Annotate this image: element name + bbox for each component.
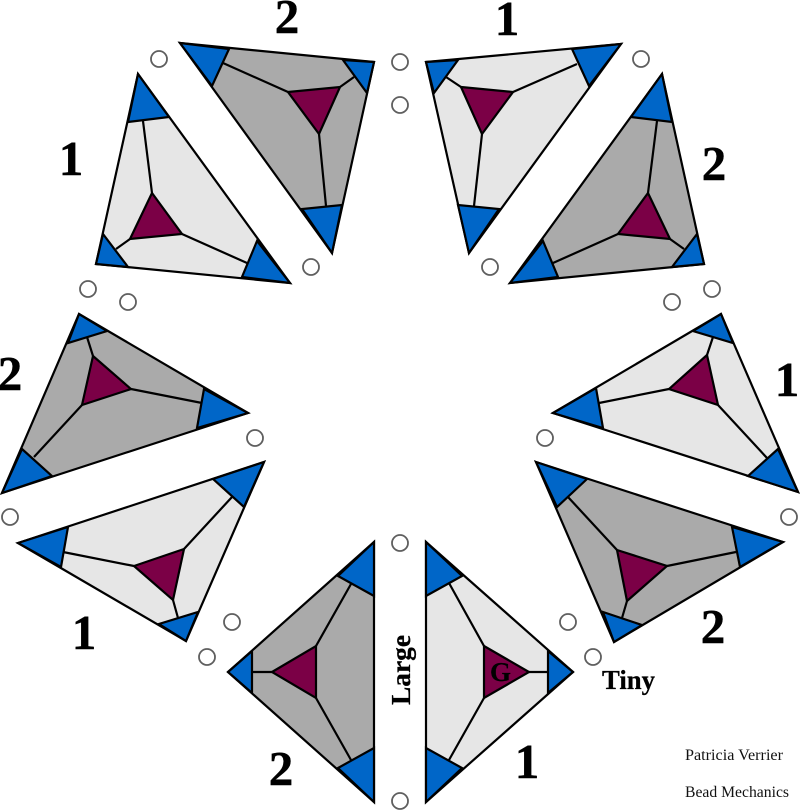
panel: lower left triangle, type 1 — [18, 462, 264, 641]
panel: top left triangle, type 2 — [180, 43, 374, 253]
type numbers: 1 — [59, 131, 83, 186]
credit: author: Patricia Verrier — [685, 747, 784, 764]
type numbers: 1 — [515, 734, 539, 789]
type numbers: 1 — [72, 605, 96, 660]
panel: right triangle, type 1 — [553, 314, 798, 492]
panel: top right triangle, type 1 — [426, 44, 621, 253]
type numbers: 2 — [702, 136, 726, 191]
panel: bottom left triangle, type 2 — [228, 542, 374, 802]
label: G: G — [490, 657, 511, 687]
type numbers: 2 — [269, 741, 293, 796]
panel: left triangle, type 2 — [2, 314, 248, 493]
type numbers: 2 — [701, 599, 725, 654]
credit: organisation: Bead Mechanics — [685, 784, 789, 801]
panel: lower right triangle, type 2 — [536, 462, 783, 642]
label: Tiny: Tiny — [602, 665, 655, 695]
panel: bottom right triangle, type 1 — [426, 542, 573, 802]
type numbers: 1 — [775, 352, 799, 407]
panel: upper right triangle, type 2 — [510, 74, 704, 283]
label: Large: Large — [386, 635, 416, 705]
panel: upper left triangle, type 1 — [96, 74, 290, 283]
